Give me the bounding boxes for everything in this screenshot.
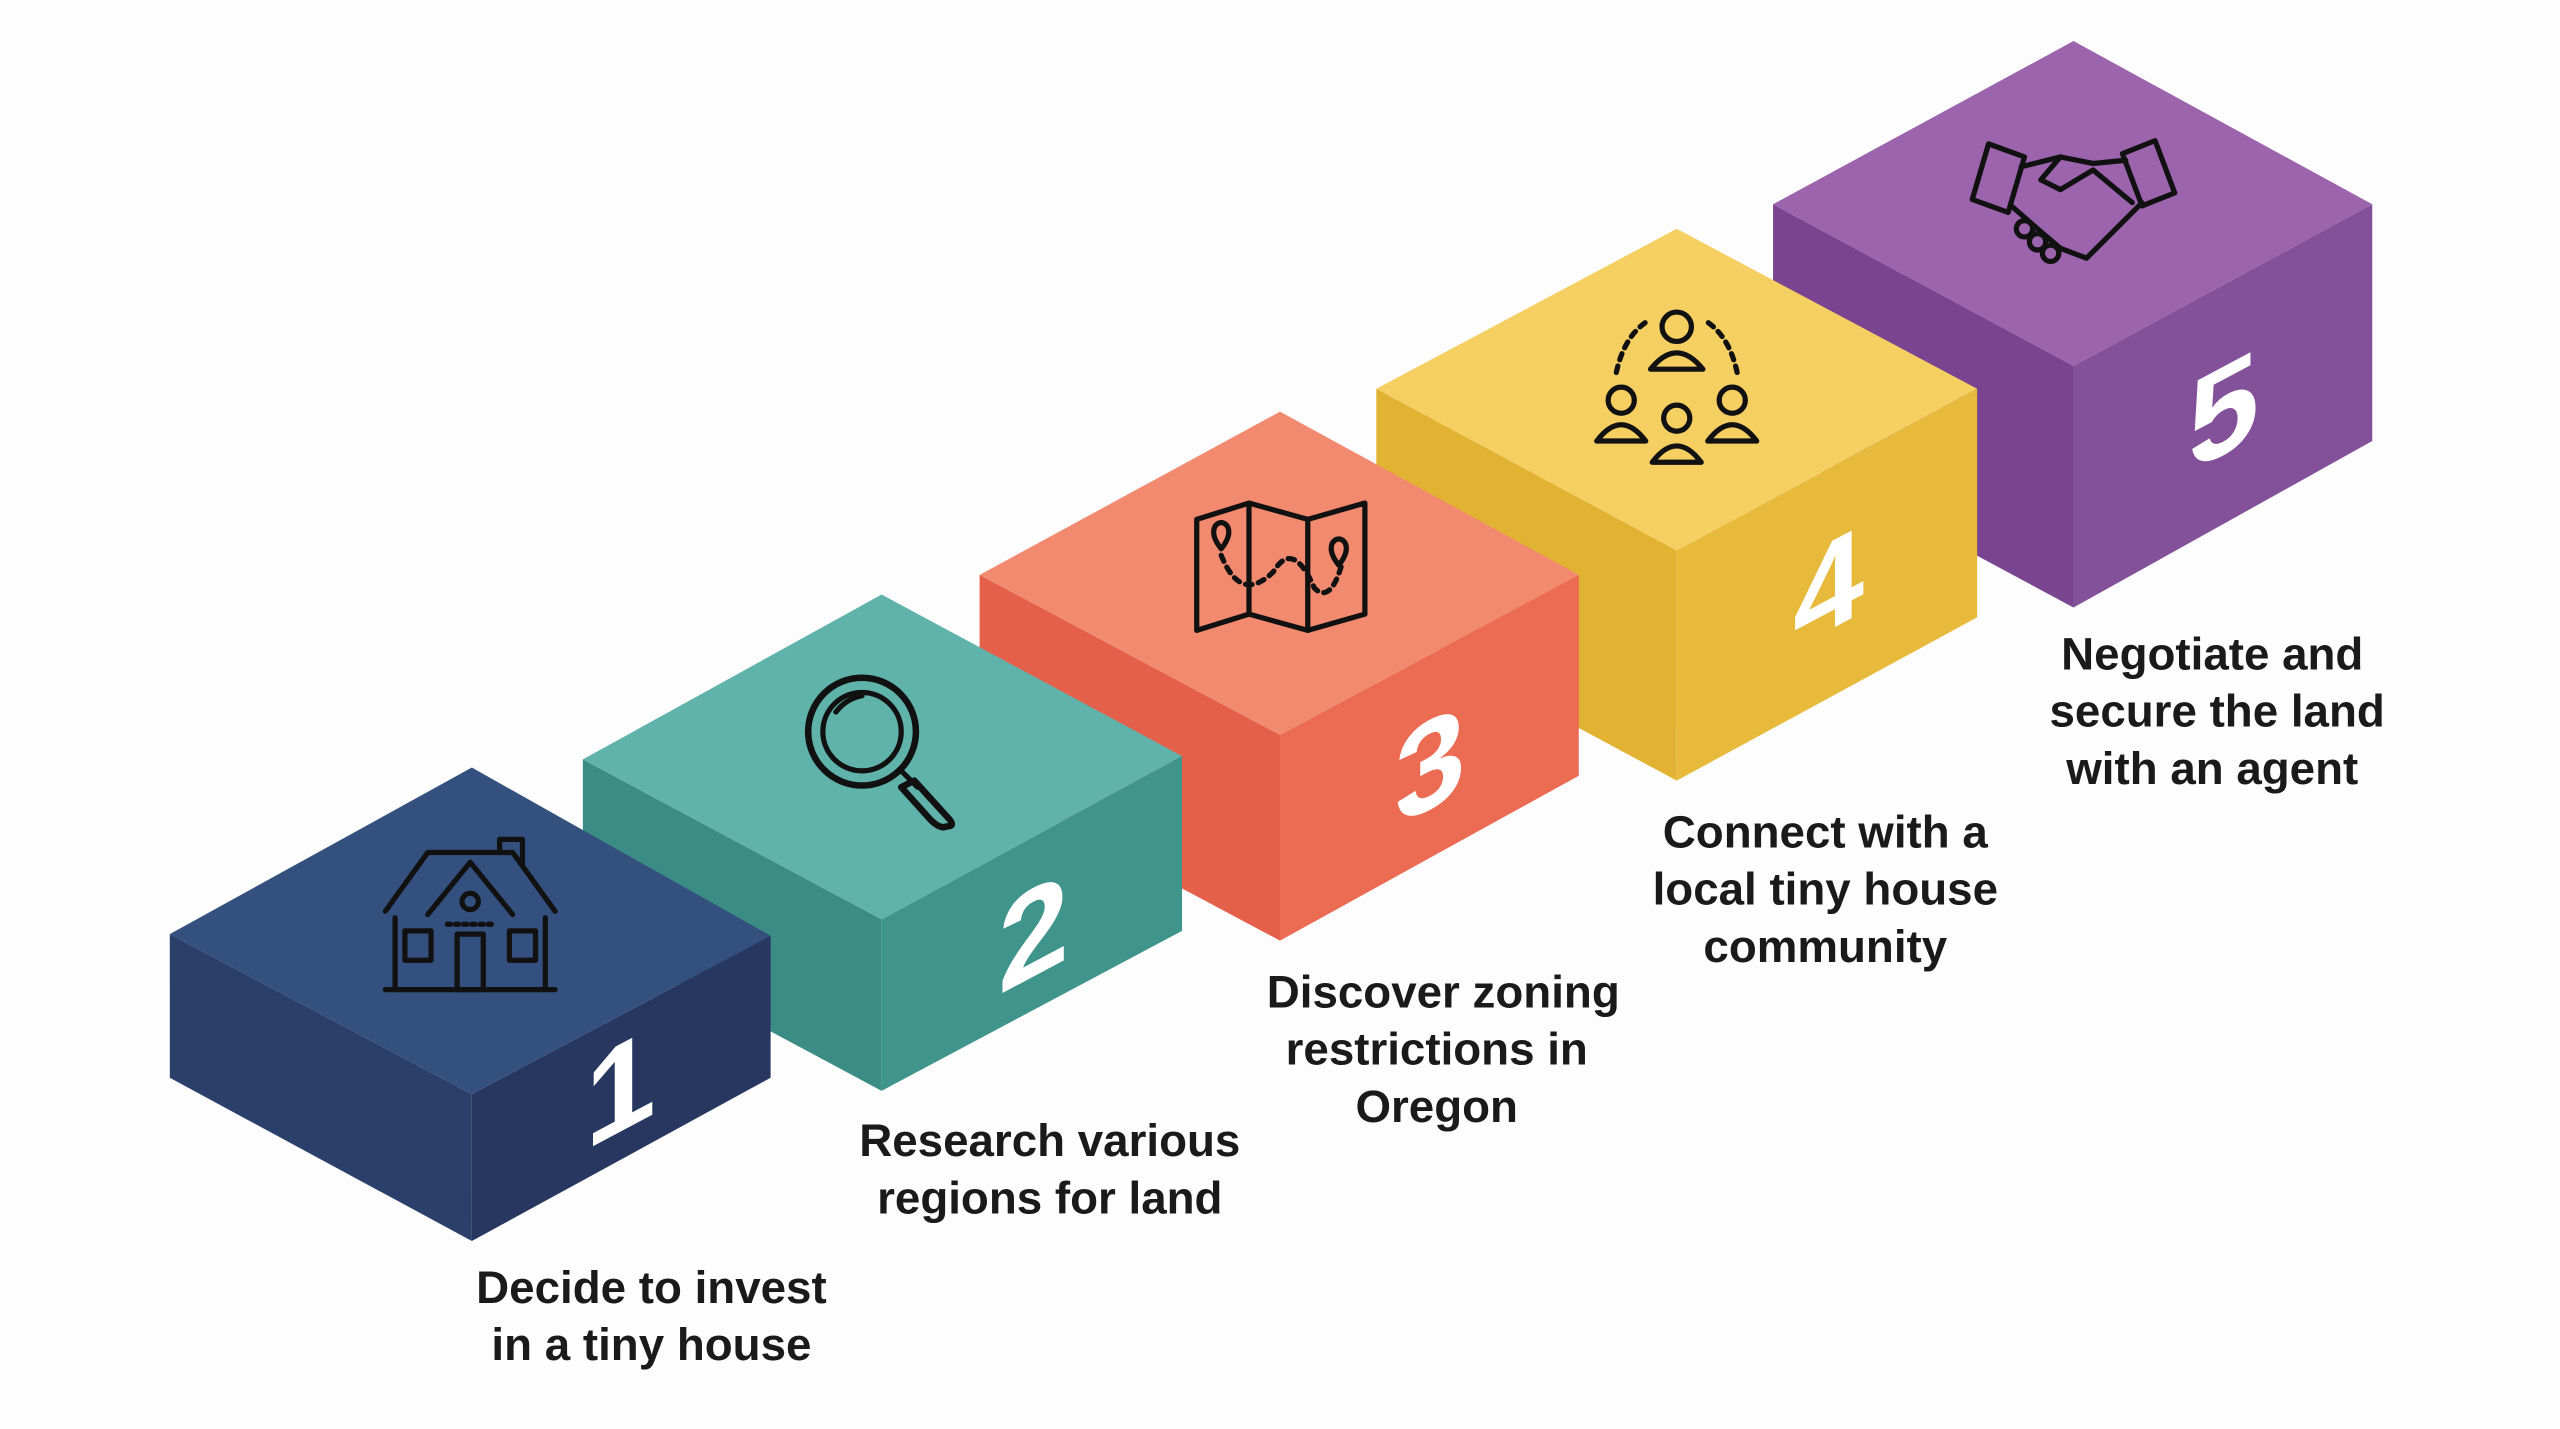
- step 3 block: [980, 412, 1579, 941]
- label 2: Research various: [859, 1115, 1240, 1166]
- number 5: 5: [2188, 320, 2259, 500]
- label 2: regions for land: [877, 1172, 1222, 1223]
- step 2 block: [583, 594, 1182, 1091]
- step 4 block: [1376, 229, 1977, 781]
- icon: map: [1197, 503, 1365, 630]
- icon: handshake: [1972, 141, 2175, 261]
- label 4: community: [1703, 921, 1948, 972]
- label 3: Discover zoning: [1267, 967, 1620, 1018]
- label 1: Decide to invest: [476, 1262, 827, 1313]
- step 1 block: [170, 768, 771, 1241]
- label 5: Negotiate and: [2061, 629, 2363, 680]
- number 4: 4: [1793, 496, 1864, 676]
- label 5: [2050, 629, 2385, 794]
- label 3: [1267, 967, 1620, 1132]
- label 4: Connect with a: [1663, 807, 1988, 858]
- label 2: [859, 1115, 1240, 1223]
- label 1: in a tiny house: [491, 1319, 811, 1370]
- label 3: restrictions in: [1286, 1024, 1588, 1075]
- label 3: Oregon: [1355, 1081, 1518, 1132]
- label 4: [1653, 807, 1998, 972]
- icon: magnifier: [808, 678, 952, 827]
- number 2: 2: [998, 843, 1069, 1023]
- icon: community: [1597, 312, 1757, 462]
- label 5: secure the land: [2050, 686, 2385, 737]
- label 4: local tiny house: [1653, 864, 1998, 915]
- step 5 block: [1773, 41, 2372, 608]
- number 1: 1: [585, 998, 656, 1178]
- icon: house: [385, 839, 555, 990]
- number 3: 3: [1395, 674, 1466, 854]
- label 1: [476, 1262, 827, 1370]
- label 5: with an agent: [2065, 743, 2358, 794]
